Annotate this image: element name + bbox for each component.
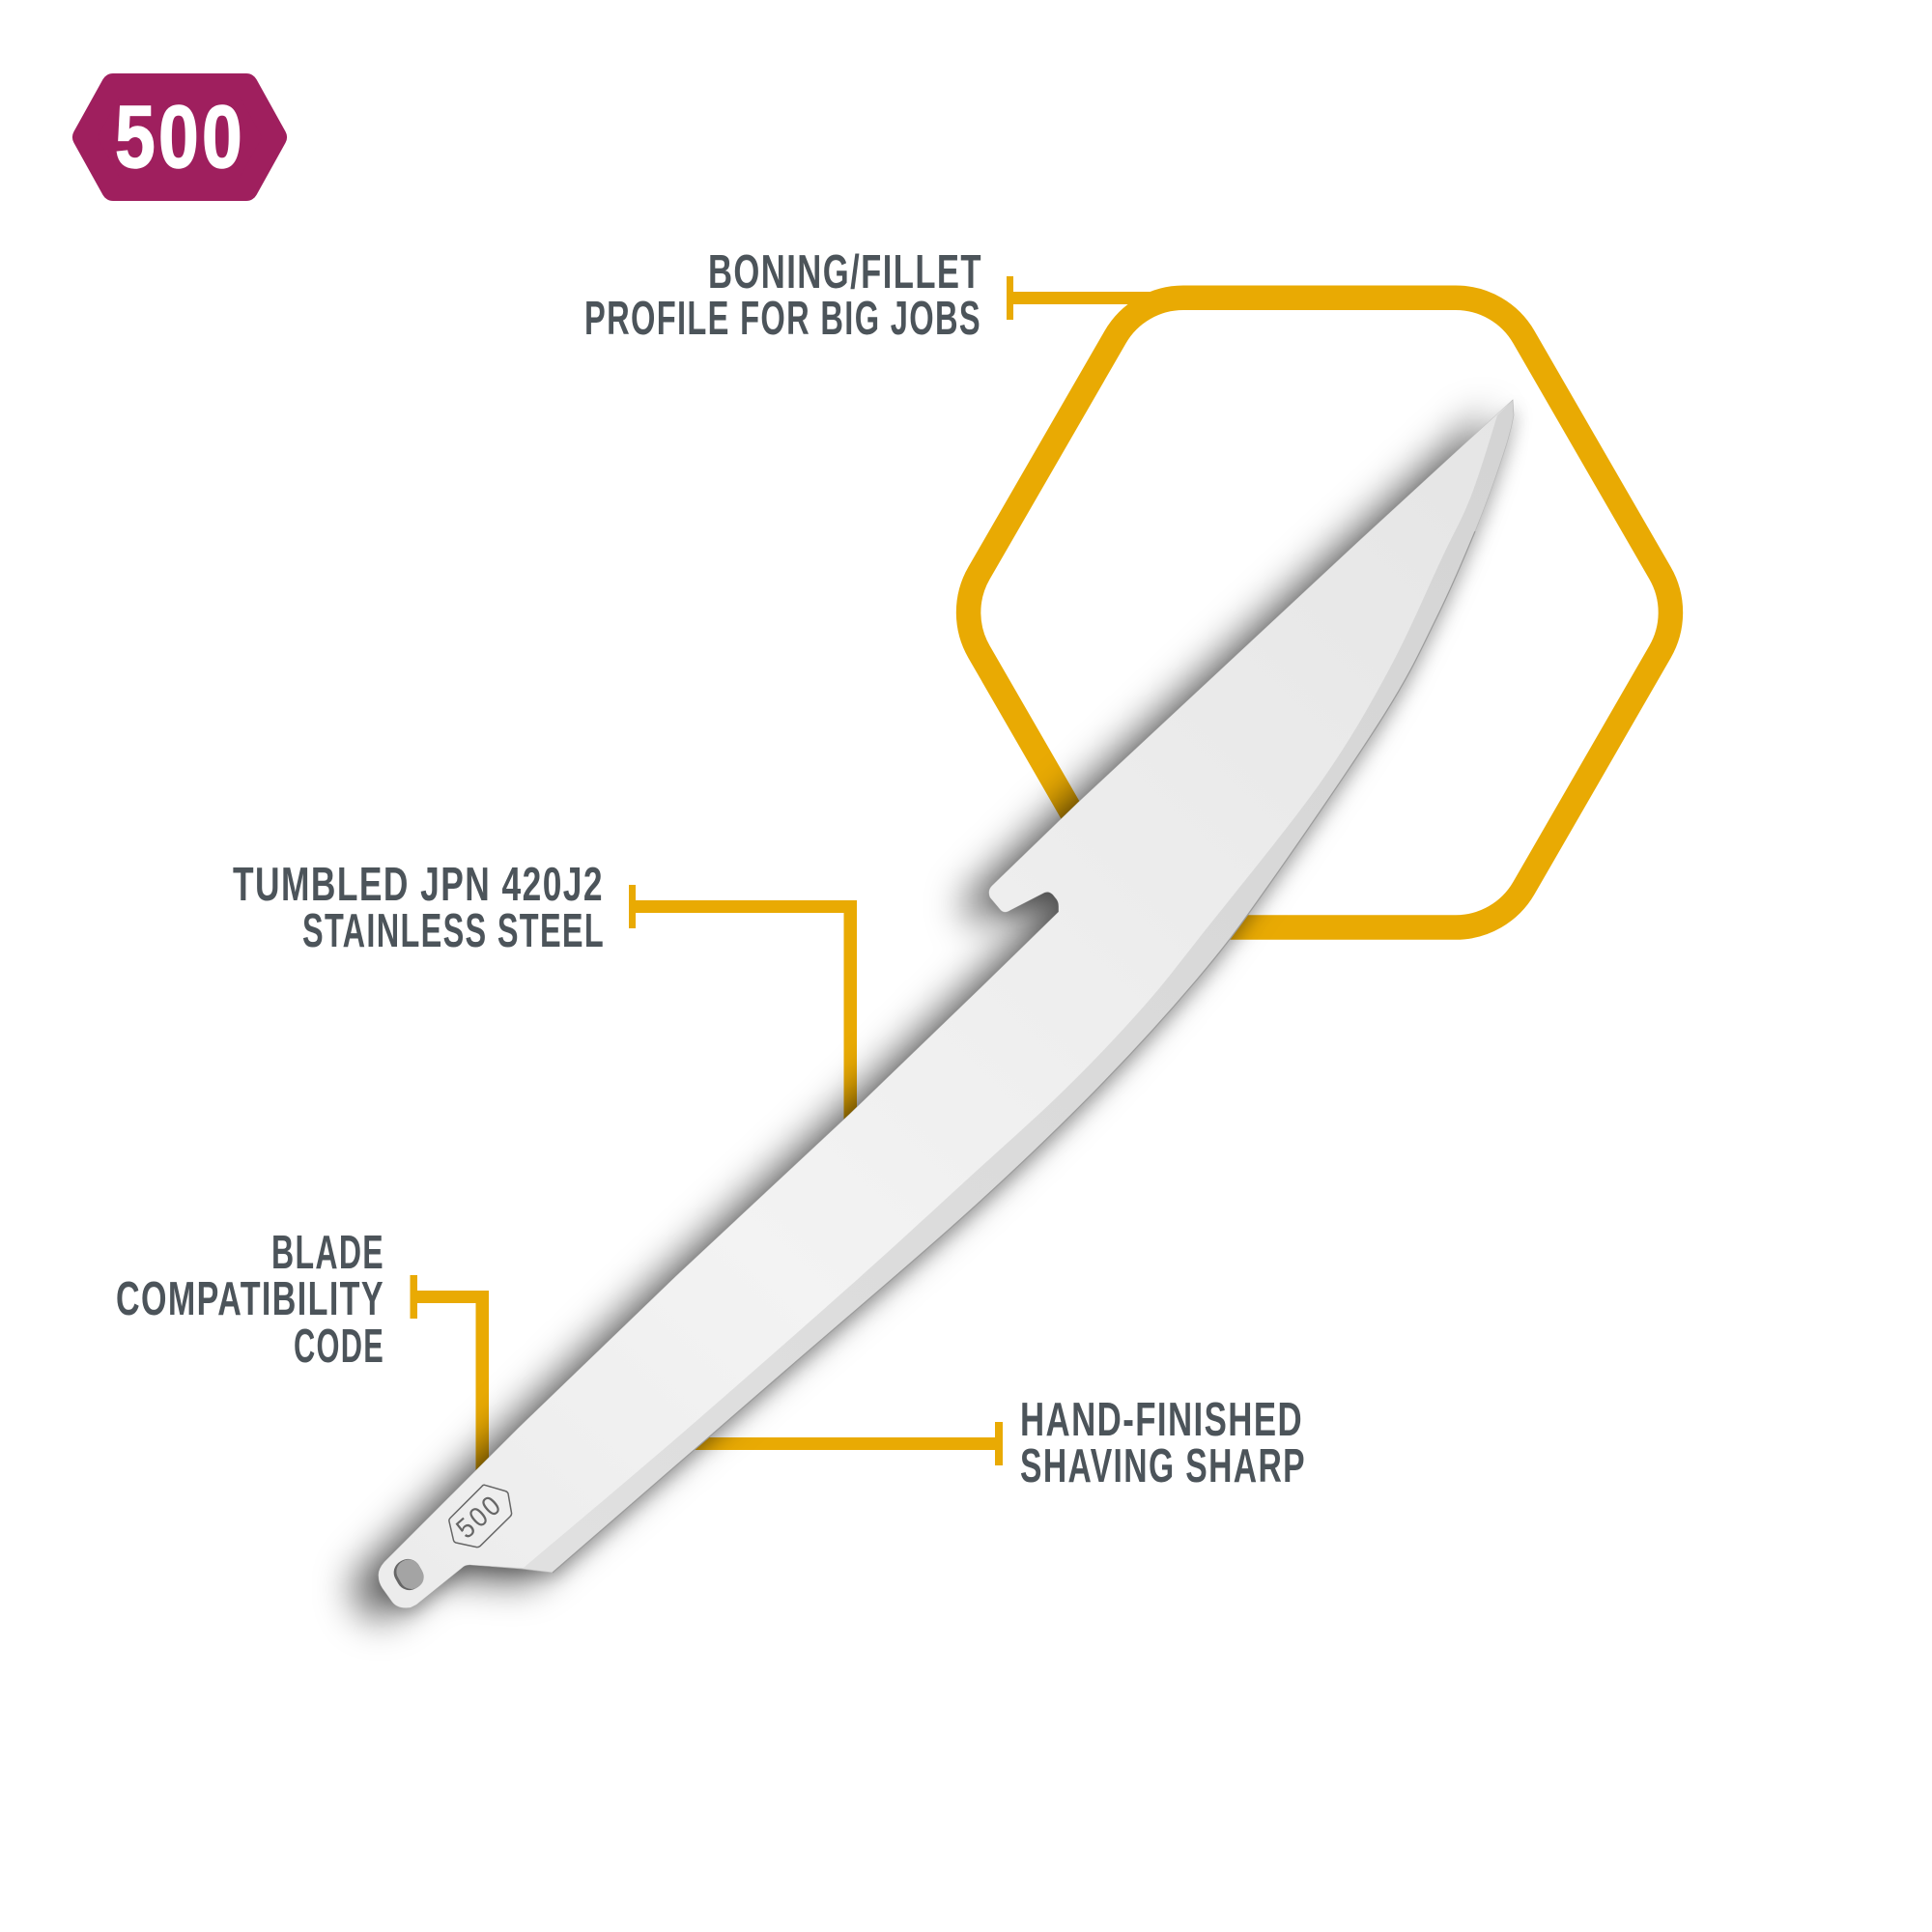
callout: compatibility code — [116, 1227, 489, 1484]
engraved compatibility code — [449, 1485, 512, 1548]
leader: boning fillet — [1007, 276, 1154, 320]
blade — [353, 400, 1517, 1619]
label: compatibility code — [116, 1227, 384, 1373]
blade flat — [379, 400, 1513, 1607]
label: steel: STAINLESS STEEL — [302, 905, 605, 957]
badge hexagon — [84, 85, 275, 189]
leader: compatibility code — [410, 1275, 489, 1484]
engraved number: 500 — [451, 1489, 509, 1545]
label: shaving sharp: HAND-FINISHED — [1020, 1394, 1303, 1446]
tang hole — [389, 1554, 428, 1595]
cutting edge line — [553, 531, 1475, 1573]
badge number: 500 — [115, 88, 245, 186]
label: shaving sharp — [1020, 1394, 1306, 1492]
leader: shaving sharp — [676, 1422, 1003, 1465]
label: compatibility code: BLADE — [271, 1227, 384, 1279]
leader: steel — [629, 885, 857, 1132]
blade back shadow — [353, 412, 1488, 1619]
label: steel: TUMBLED JPN 420J2 — [233, 859, 604, 911]
blade edge shadow — [382, 406, 1517, 1613]
callout: shaving sharp — [676, 1394, 1306, 1492]
badge: 500 — [84, 85, 275, 189]
label: boning fillet: PROFILE FOR BIG JOBS — [584, 293, 981, 345]
engraved hexagon — [449, 1485, 512, 1548]
label: boning fillet: BONING/FILLET — [708, 246, 982, 298]
ground bevel — [379, 400, 1514, 1607]
label: boning fillet — [584, 246, 982, 345]
label: compatibility code: CODE — [294, 1321, 384, 1373]
label: steel — [233, 859, 605, 957]
label: compatibility code: COMPATIBILITY — [116, 1273, 384, 1325]
hexagon frame — [969, 298, 1670, 927]
callout: boning fillet profile — [584, 246, 1154, 345]
label: shaving sharp: SHAVING SHARP — [1020, 1440, 1306, 1492]
callout: steel — [233, 859, 857, 1132]
